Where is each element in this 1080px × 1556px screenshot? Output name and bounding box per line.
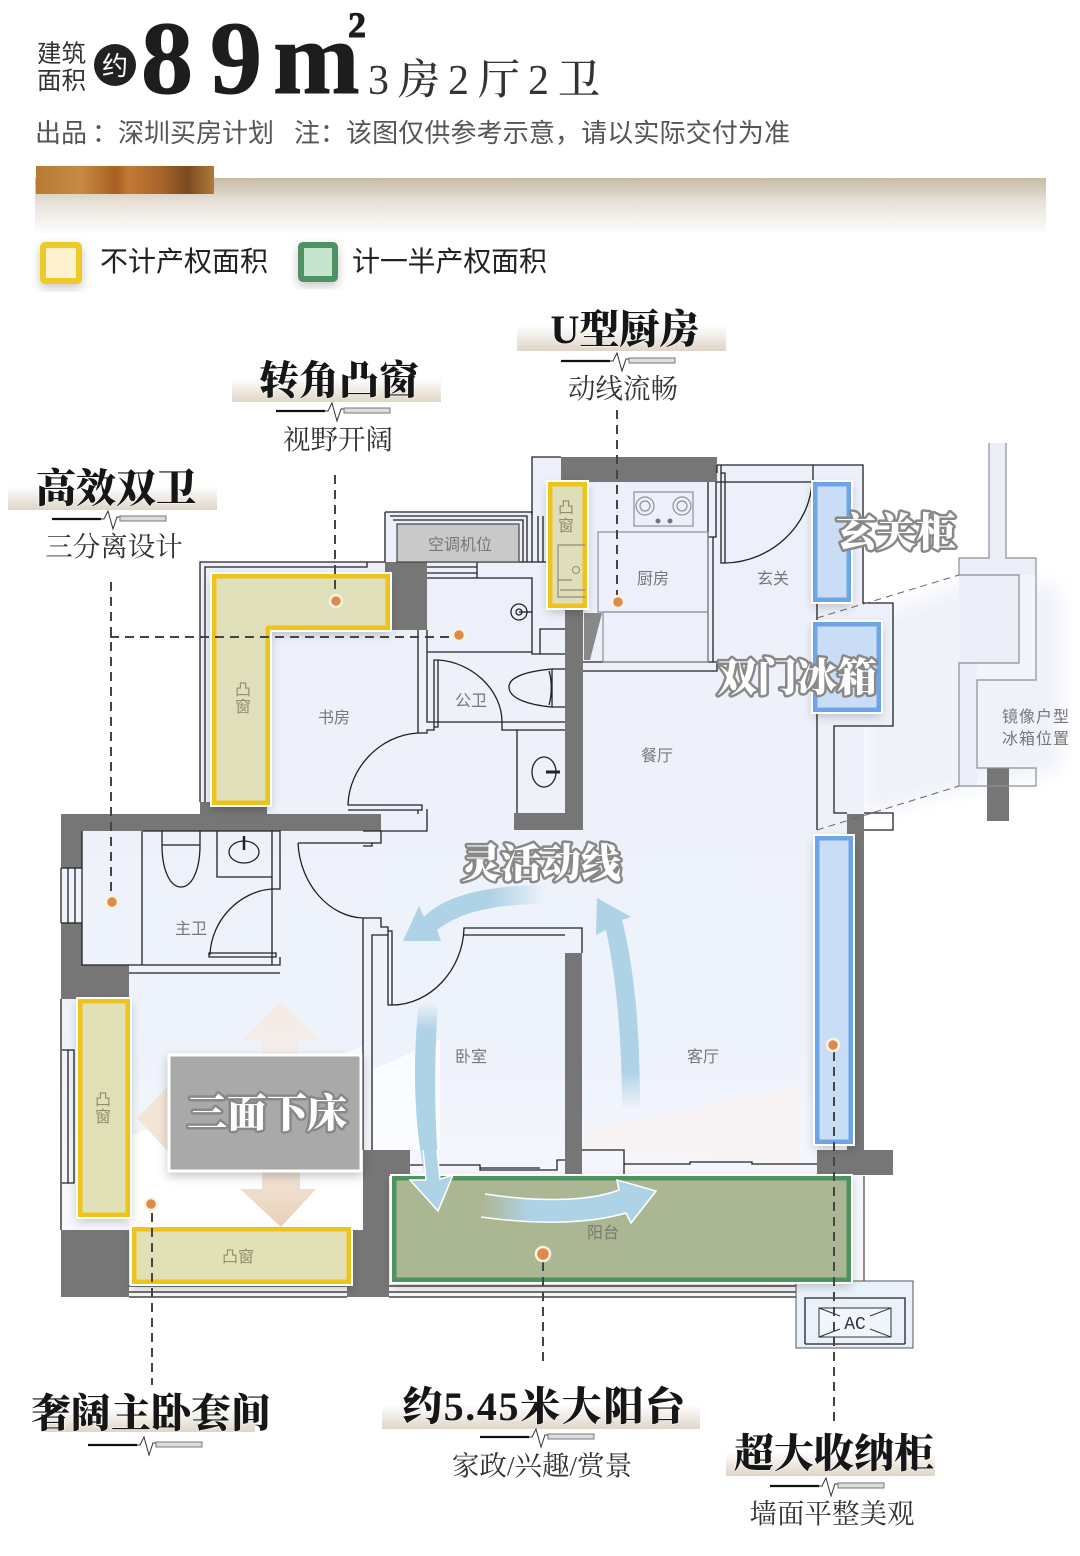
flow arrow: down	[410, 1003, 453, 1211]
callout: two bathrooms: 三分离设计	[45, 531, 183, 562]
master bay window left highlight: 凸	[95, 1092, 111, 1109]
walls	[61, 457, 1009, 1297]
room labels: 书房	[318, 709, 350, 727]
area number 89 m²: m	[273, 1, 360, 116]
layout: 3房2厅2卫: 房	[398, 57, 440, 104]
subtitle and note: 注：	[294, 118, 346, 148]
subtitle and note: 深圳买房计划	[118, 118, 274, 148]
label: 建筑面积: 建筑	[37, 40, 86, 68]
callout box: three-sided bed access: 三面下床	[187, 1091, 347, 1136]
mirror layout inset: 镜像户型	[1002, 707, 1069, 726]
area number 89 m²: 8	[141, 1, 193, 116]
area number 89 m²: 2	[348, 5, 366, 45]
floor fill	[61, 443, 1060, 1297]
kitchen bay window highlight	[547, 481, 588, 609]
overlay label: flexible circulation: 灵活动线	[461, 841, 621, 886]
room labels: 公卫	[455, 693, 487, 710]
panel: floor plan	[61, 410, 1069, 1422]
subtitle and note: 该图仅供参考示意，请以实际交付为准	[346, 118, 790, 148]
callout: master suite: 奢阔主卧套间	[31, 1391, 271, 1436]
area number 89 m²: 9	[210, 1, 262, 116]
overlay label: double-door fridge: 双门冰箱	[717, 655, 877, 700]
decorative header bar	[35, 166, 1046, 235]
callout: wardrobe: 墙面平整美观	[750, 1498, 914, 1529]
callout: two bathrooms: 高效双卫	[36, 466, 196, 511]
marker dots	[106, 595, 839, 1261]
kitchen fixtures	[584, 492, 708, 662]
mirror layout inset	[817, 443, 1069, 830]
callout: U kitchen: U型厨房	[551, 307, 699, 352]
AC outdoor box: AC	[844, 1315, 866, 1335]
title: building area	[37, 1, 600, 116]
legend	[43, 245, 547, 281]
balcony highlight	[391, 1175, 852, 1283]
callout box: three-sided bed access	[169, 1055, 361, 1171]
callout: corner bay window: 转角凸窗	[259, 358, 419, 403]
callout: balcony	[382, 1384, 700, 1481]
area number 89 m²	[141, 1, 366, 116]
legend: not counted: 不计产权面积	[100, 246, 268, 277]
layout: 3房2厅2卫: 2	[528, 58, 549, 104]
mirror layout inset: 冰箱位置	[1002, 730, 1069, 748]
entry cabinet highlight	[812, 481, 852, 603]
corner bay window highlight: 凸	[235, 682, 251, 699]
balcony highlight: 阳台	[587, 1224, 619, 1242]
callout: U kitchen	[517, 307, 726, 404]
badge: 约	[94, 44, 136, 86]
AC unit platform: 空调机位	[428, 536, 492, 554]
callout: wardrobe: 超大收纳柜	[734, 1431, 934, 1476]
flow arrow: right	[481, 1180, 656, 1223]
bed access arrows	[137, 1002, 319, 1227]
callout: corner bay window: 视野开阔	[283, 424, 393, 455]
callout: wardrobe	[726, 1431, 935, 1529]
AC unit platform	[397, 524, 519, 562]
master bay window bottom highlight: 凸窗	[222, 1248, 254, 1266]
room labels: 卧室	[455, 1048, 487, 1066]
leader lines	[110, 410, 834, 1422]
flow arrow: top left	[403, 885, 545, 941]
subtitle and note: ：	[92, 118, 118, 148]
callout: two bathrooms	[8, 466, 217, 562]
linework	[61, 457, 913, 1348]
master bay window left highlight: 窗	[95, 1108, 111, 1126]
AC outdoor box	[796, 1281, 913, 1348]
badge: 约: 约	[102, 51, 128, 81]
callout: balcony: 家政/兴趣/赏景	[452, 1450, 632, 1481]
layout: 3房2厅2卫: 2	[448, 58, 469, 104]
layout: 3房2厅2卫: 厅	[478, 58, 520, 104]
corner bay window highlight	[211, 573, 391, 806]
room labels: 客厅	[687, 1048, 719, 1066]
room labels: 餐厅	[641, 747, 673, 765]
kitchen bay window highlight: 凸	[558, 500, 574, 517]
layout: 3房2厅2卫	[368, 57, 600, 104]
overlay label: entry cabinet: 玄关柜	[836, 510, 956, 555]
room labels: 厨房	[637, 570, 669, 588]
callout: corner bay window	[232, 358, 441, 455]
layout: 3房2厅2卫: 3	[368, 58, 389, 104]
kitchen bay window highlight: 窗	[558, 517, 574, 535]
layout: 3房2厅2卫: 卫	[558, 58, 600, 104]
legend: not counted	[43, 245, 268, 281]
wardrobe highlight	[814, 835, 854, 1145]
callout: U kitchen: 动线流畅	[568, 373, 678, 404]
fridge highlight	[812, 621, 882, 713]
flow arrow: up	[596, 898, 640, 1110]
room labels: 主卫	[175, 920, 207, 938]
subtitle and note: 出品	[35, 118, 87, 148]
callout: balcony: 约5.45米大阳台	[402, 1384, 688, 1429]
room labels	[175, 570, 789, 1066]
corner bay window highlight: 窗	[235, 698, 251, 716]
label: 建筑面积: 面积	[37, 67, 86, 95]
legend: half counted: 计一半产权面积	[352, 246, 547, 277]
master bay window bottom highlight	[131, 1226, 352, 1285]
room labels: 玄关	[757, 570, 789, 588]
master bay window left highlight	[77, 998, 131, 1218]
label: 建筑面积	[37, 40, 86, 95]
